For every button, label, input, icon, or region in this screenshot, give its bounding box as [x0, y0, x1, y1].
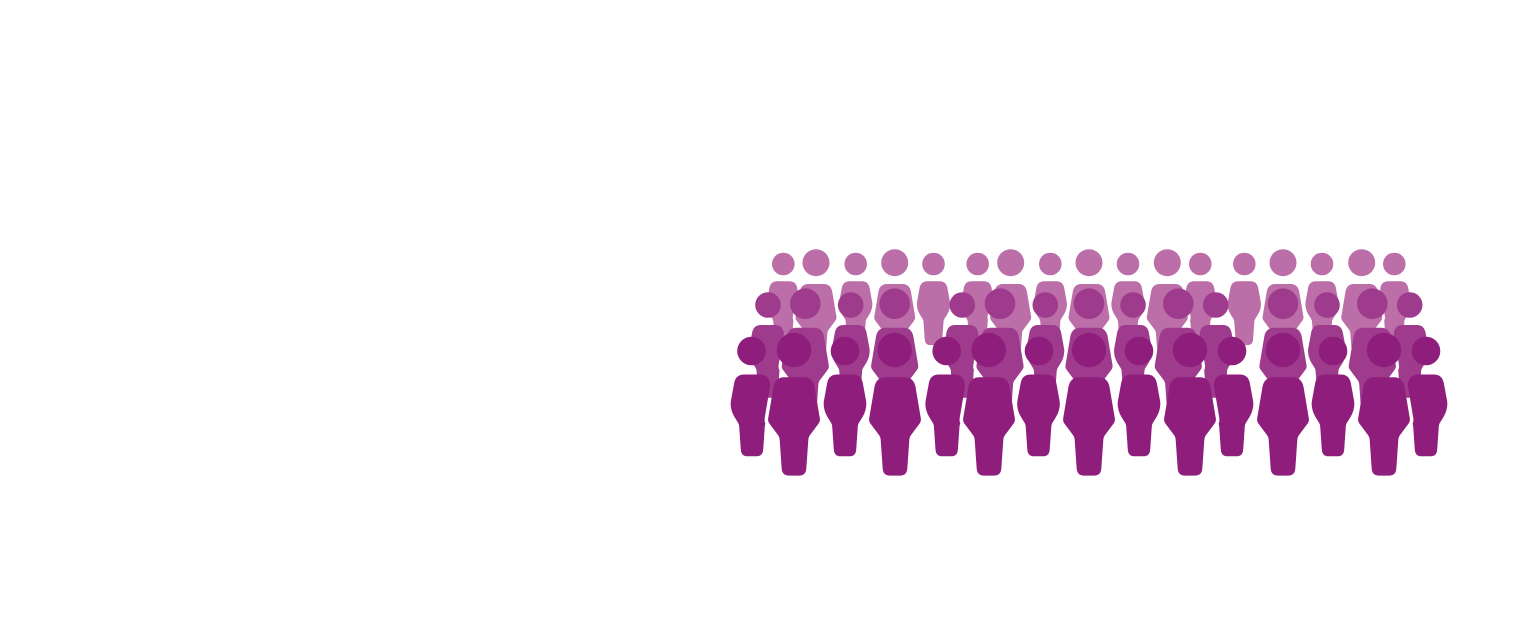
back row of people (light purple) — [767, 249, 1411, 362]
front row of people (dark purple) — [731, 333, 1447, 476]
middle row of people (medium purple) — [751, 288, 1426, 404]
pictogram: crowd of people in three rows — [730, 249, 1448, 476]
